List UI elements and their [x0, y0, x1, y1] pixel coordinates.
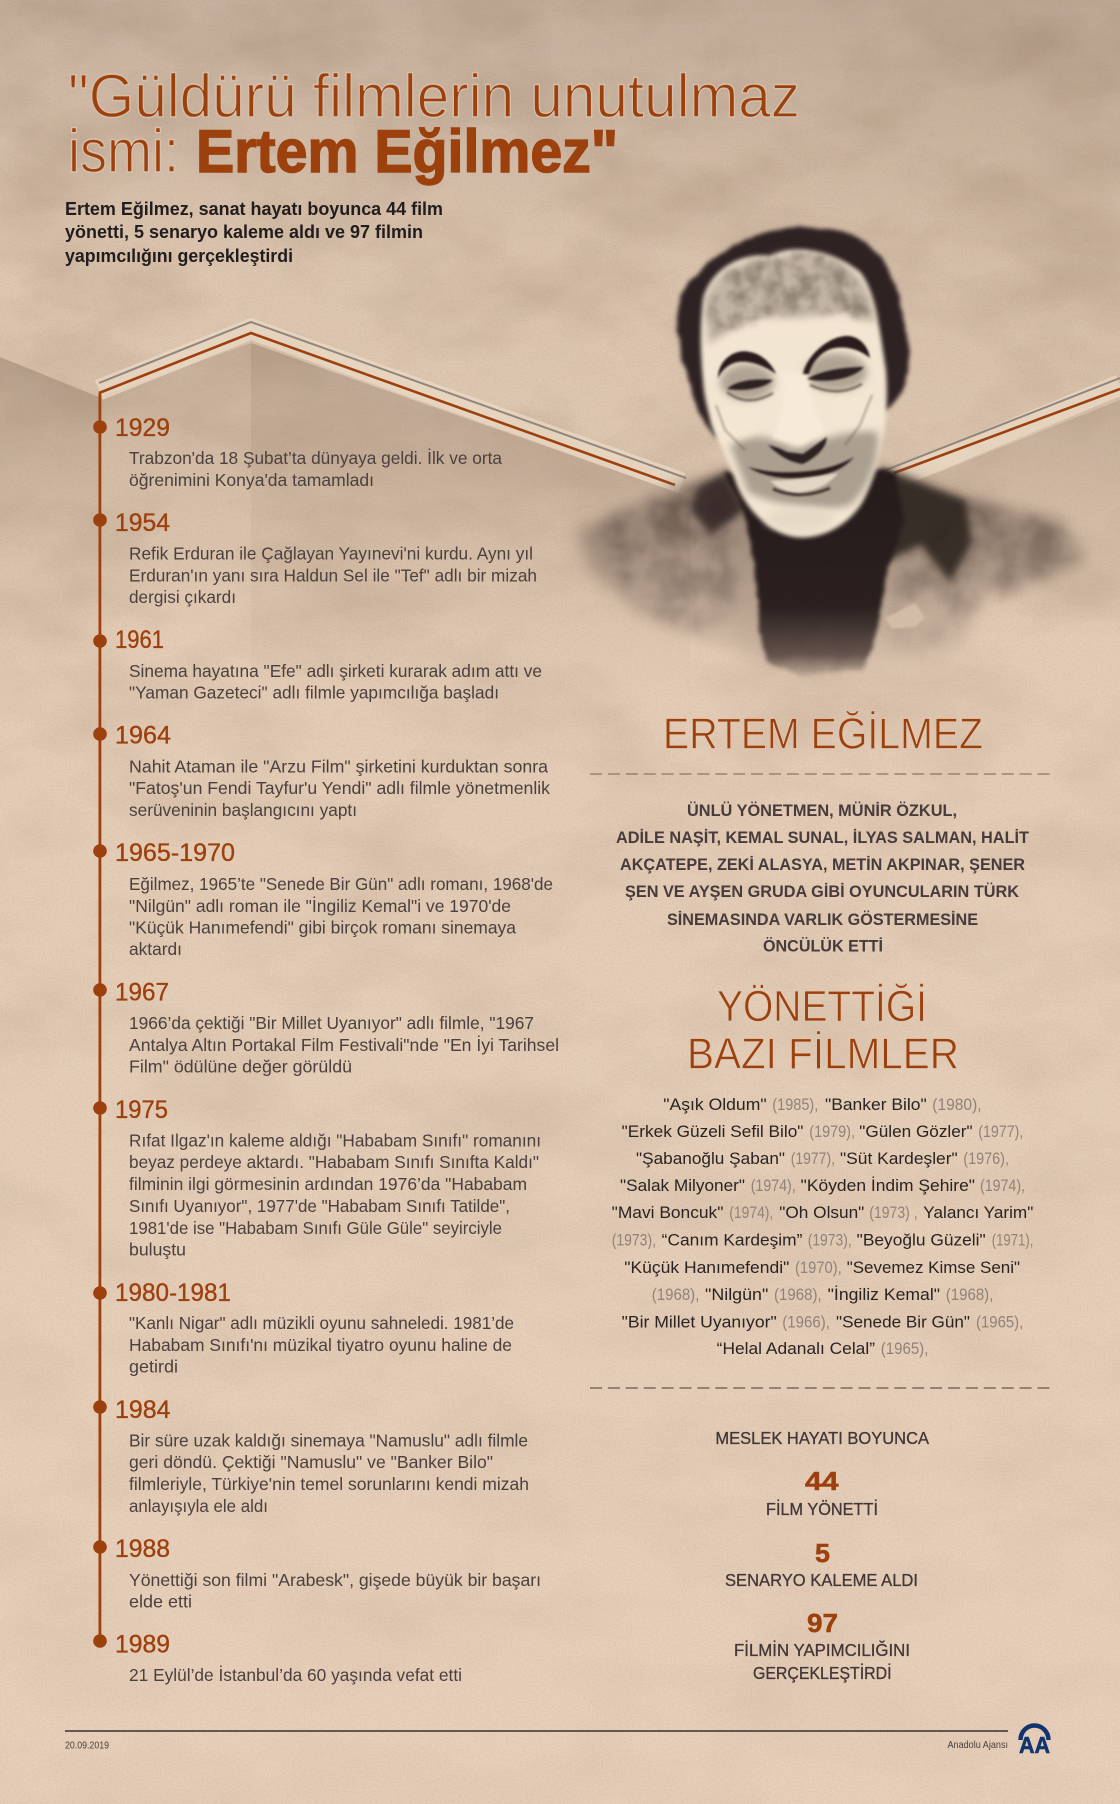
cheek wrinkles [716, 395, 872, 450]
cheek highlights [713, 404, 757, 438]
entry: 1989: 21 Eylül’de İstanbul’da 60 yaşında vefat etti [129, 1665, 462, 1685]
face [701, 248, 887, 538]
stat: 44 films: FİLM YÖNETTİ [766, 1499, 878, 1519]
pocket patch [885, 603, 925, 629]
film list: (1985), [772, 1095, 818, 1114]
portrait of Ertem Eğilmez [578, 227, 1087, 685]
right lapel [884, 470, 972, 582]
entry: 1954: Erduran'ın yanı sıra Haldun Sel ile "Tef" adlı bir mizah [129, 566, 537, 586]
entry: 1984: Bir süre uzak kaldığı sinemaya "Namuslu" adlı filmle [129, 1430, 528, 1450]
entry: 1965-1970: aktardı [129, 939, 182, 959]
entry: 1965-1970 [93, 839, 553, 959]
entry: 1929: öğrenimini Konya'da tamamladı [129, 470, 374, 490]
entry: 1975: buluştu [129, 1240, 186, 1260]
entry: 1964: 1964 [115, 722, 171, 750]
jacket [578, 470, 1087, 685]
entry: 1929: Trabzon'da 18 Şubat’ta dünyaya geldi. İlk ve orta [129, 448, 502, 468]
lower face shading [730, 431, 878, 508]
lower lip [770, 473, 838, 493]
film list: (1977), [791, 1149, 835, 1168]
entry: 1967: 1966’da çektiği "Bir Millet Uyanıyor" adlı filmle, "1967 [129, 1013, 534, 1033]
subtitle: yapımcılığını gerçekleştirdi [65, 246, 293, 266]
entry: 1988: elde etti [129, 1592, 192, 1612]
forehead texture [706, 248, 874, 335]
date: 20.09.2019 [65, 1740, 109, 1752]
right eye [807, 367, 864, 381]
entry: 1989: 1989 [115, 1630, 170, 1658]
entry: 1989 [93, 1630, 462, 1685]
entry: 1964: "Fatoş'un Fendi Tayfur'u Yendi" adlı filmle yönetmenlik [129, 778, 550, 798]
film list: "Küçük Hanımefendi" [624, 1258, 789, 1277]
film list: (1965), [976, 1312, 1023, 1332]
biography paragraph: ADİLE NAŞİT, KEMAL SUNAL, İLYAS SALMAN, HALİT [616, 829, 1029, 847]
entry: 1954 [93, 509, 537, 607]
entry: 1964: Nahit Ataman ile "Arzu Film" şirketini kurduktan sonra [129, 756, 548, 776]
entry: 1984: anlayışıyla ele aldı [129, 1496, 268, 1516]
entry: 1961 [93, 626, 542, 702]
subtitle: Ertem Eğilmez, sanat hayatı boyunca 44 film [65, 199, 443, 219]
subtitle: yönetti, 5 senaryo kaleme aldı ve 97 filmin [65, 222, 423, 242]
divider [590, 773, 1055, 775]
film list: "Köyden İndim Şehire" [801, 1176, 975, 1195]
film list: (1973) , [869, 1203, 918, 1222]
stat: 5 screenplays: 5 [815, 1538, 830, 1568]
film list: "Mavi Boncuk" [612, 1203, 723, 1222]
film list: (1977), [978, 1122, 1023, 1141]
entry: 1975: filminin ilgi görmesinin ardından 1976’da "Hababam [129, 1174, 527, 1194]
credit: Anadolu Ajansı [948, 1739, 1008, 1751]
career stats [715, 1428, 929, 1683]
entry: 1988: Yönettiği son filmi "Arabesk", gişede büyük bir başarı [129, 1570, 541, 1590]
entry: 1975: beyaz perdeye aktardı. "Hababam Sınıfı Sınıfta Kaldı" [129, 1152, 539, 1172]
chin highlight [766, 507, 834, 531]
title: Ertem Eğilmez" [196, 118, 618, 185]
mouth [748, 457, 854, 478]
entry: 1984: geri döndü. Çektiği "Namuslu" ve "Banker Bilo" [129, 1452, 493, 1472]
heading: Ertem Eğilmez: ERTEM EĞİLMEZ [663, 710, 983, 758]
film list: "Gülen Gözler" [859, 1122, 973, 1141]
stat: 44 films: 44 [805, 1466, 839, 1496]
entry: 1961: Sinema hayatına "Efe" adlı şirketi kurarak adım attı ve [129, 661, 542, 681]
stats heading: MESLEK HAYATI BOYUNCA [715, 1428, 929, 1448]
entry: 1965-1970: 1965-1970 [115, 839, 235, 867]
entry: 1975: 1975 [115, 1096, 168, 1124]
film list: “Canım Kardeşim” [662, 1230, 803, 1250]
title: "Güldürü filmlerin unutulmaz [68, 62, 800, 130]
film list: (1974), [980, 1176, 1025, 1195]
skin base [701, 249, 887, 538]
zigzag lines [99, 322, 1120, 485]
forehead shading [706, 253, 876, 345]
nose [768, 437, 827, 464]
stat: 97 productions [734, 1608, 910, 1683]
eye sockets [720, 364, 774, 400]
film list: Yalancı Yarim" [923, 1203, 1033, 1222]
entry: 1961: "Yaman Gazeteci" adlı filmle yapımcılığa başladı [129, 682, 499, 702]
entry: 1980-1981: 1980-1981 [115, 1279, 231, 1307]
left eye [727, 379, 773, 390]
biography paragraph: ÖNCÜLÜK ETTİ [763, 936, 883, 956]
entry: 1967: Film" ödülüne değer görüldü [129, 1056, 352, 1076]
film list: "Banker Bilo" [825, 1095, 927, 1114]
film list: (1974), [729, 1203, 773, 1222]
film list: "Oh Olsun" [779, 1203, 864, 1222]
stat: 44 films [766, 1466, 878, 1519]
entry: 1965-1970: Eğilmez, 1965’te "Senede Bir Gün" adlı romanı, 1968'de [129, 874, 553, 894]
icon: Anadolu Agency logo: AA [1019, 1732, 1050, 1758]
film list: "Erkek Güzeli Sefil Bilo" [622, 1122, 803, 1141]
biography paragraph [616, 801, 1029, 956]
film list: (1971), [992, 1230, 1033, 1250]
film list: (1979), [809, 1122, 855, 1141]
entry: 1984 [93, 1396, 529, 1516]
entry: 1965-1970: "Nilgün" adlı roman ile "İngiliz Kemal"i ve 1970'de [129, 896, 511, 916]
entry: 1967: 1967 [115, 978, 169, 1006]
film list: (1973), [808, 1230, 852, 1250]
stat: 5 screenplays: SENARYO KALEME ALDI [725, 1570, 918, 1590]
biography paragraph: SİNEMASINDA VARLIK GÖSTERMESİNE [667, 910, 978, 929]
film list: "Bir Millet Uyanıyor" [622, 1312, 777, 1332]
film list: "Şabanoğlu Şaban" [636, 1149, 785, 1168]
left eyebrow [718, 351, 776, 378]
film list: "Sevemez Kimse Seni" [847, 1258, 1020, 1277]
biography paragraph: ŞEN VE AYŞEN GRUDA GİBİ OYUNCULARIN TÜRK [625, 882, 1019, 901]
nose bridge [772, 372, 826, 446]
entry: 1954: 1954 [115, 509, 170, 537]
entry: 1980-1981: getirdi [129, 1356, 178, 1376]
film list: "Salak Milyoner" [620, 1176, 745, 1195]
film list: (1974), [751, 1176, 796, 1195]
entry: 1967 [93, 978, 559, 1076]
entry: 1984: 1984 [115, 1396, 171, 1424]
biography paragraph: AKÇATEPE, ZEKİ ALASYA, METİN AKPINAR, ŞENER [620, 856, 1025, 874]
footer [65, 1726, 1050, 1758]
heading: films: YÖNETTİĞİ [717, 982, 927, 1031]
heading: films: BAZI FİLMLER [687, 1030, 959, 1078]
film list: (1970), [795, 1258, 842, 1277]
entry: 1980-1981: Hababam Sınıfı'nı müzikal tiyatro oyunu haline de [129, 1335, 512, 1355]
film list: (1966), [782, 1312, 830, 1332]
stat: 97 productions: GERÇEKLEŞTİRDİ [753, 1663, 892, 1683]
film list: "Aşık Oldum" [663, 1095, 767, 1114]
entry: 1988 [93, 1535, 541, 1612]
film list: "Beyoğlu Güzeli" [857, 1230, 986, 1250]
film list: (1973), [612, 1230, 656, 1250]
timeline axis [98, 393, 101, 1641]
entry: 1929 [93, 414, 502, 490]
mountain shapes behind the timeline [0, 343, 1120, 700]
entry: 1975 [93, 1096, 541, 1260]
under eye bags [727, 384, 862, 400]
film list [612, 1095, 1033, 1358]
film list: (1968), [652, 1285, 699, 1304]
entry: 1975: 1981'de ise "Hababam Sınıfı Güle Güle" seyirciyle [129, 1218, 502, 1238]
title [68, 62, 800, 185]
film list: (1968), [946, 1285, 993, 1304]
film list: “Helal Adanalı Celal” [717, 1339, 875, 1358]
subtitle [65, 199, 443, 266]
film list: "Senede Bir Gün" [836, 1312, 970, 1332]
hair [677, 227, 909, 438]
entry: 1988: 1988 [115, 1535, 170, 1563]
biography paragraph: ÜNLÜ YÖNETMEN, MÜNİR ÖZKUL, [687, 801, 957, 820]
entry: 1975: Rıfat Ilgaz'ın kaleme aldığı "Hababam Sınıfı" romanını [129, 1130, 541, 1150]
entry: 1975: Sınıfı Uyanıyor", 1977'de "Hababam Sınıfı Tatilde", [129, 1196, 510, 1216]
film list: (1968), [774, 1285, 822, 1304]
entry: 1980-1981 [93, 1279, 514, 1376]
timeline [93, 393, 559, 1685]
stat: 97 productions: 97 [807, 1608, 838, 1638]
stat: 97 productions: FİLMİN YAPIMCILIĞINI [734, 1639, 910, 1660]
entry: 1964 [93, 722, 550, 820]
left collar [690, 473, 744, 535]
entry: 1961: 1961 [115, 626, 164, 654]
film list: (1976), [963, 1149, 1009, 1168]
entry: 1929: 1929 [115, 414, 170, 442]
entry: 1965-1970: "Küçük Hanımefendi" gibi birçok romanı sinemaya [129, 918, 516, 938]
right eyebrow [803, 336, 870, 374]
stat: 5 screenplays [725, 1538, 918, 1590]
film list: (1980), [932, 1095, 982, 1114]
entry: 1980-1981: "Kanlı Nigar" adlı müzikli oyunu sahneledi. 1981’de [129, 1313, 514, 1333]
film list: (1965), [881, 1339, 928, 1358]
divider [590, 1387, 1055, 1389]
film list: "Süt Kardeşler" [840, 1149, 958, 1168]
film list: "İngiliz Kemal" [828, 1285, 940, 1304]
heading: films [687, 982, 959, 1078]
entry: 1984: filmleriyle, Türkiye'nin temel sorunlarını kendi mizah [129, 1474, 529, 1494]
entry: 1964: serüveninin başlangıcını yaptı [129, 800, 357, 820]
entry: 1954: dergisi çıkardı [129, 587, 236, 607]
entry: 1954: Refik Erduran ile Çağlayan Yayınevi'ni kurdu. Aynı yıl [129, 544, 533, 564]
entry: 1967: Antalya Altın Portakal Film Festivali"nde "En İyi Tarihsel [129, 1035, 559, 1055]
dark sweater [723, 468, 905, 675]
film list: "Nilgün" [705, 1285, 768, 1304]
title: ismi: [68, 117, 179, 185]
